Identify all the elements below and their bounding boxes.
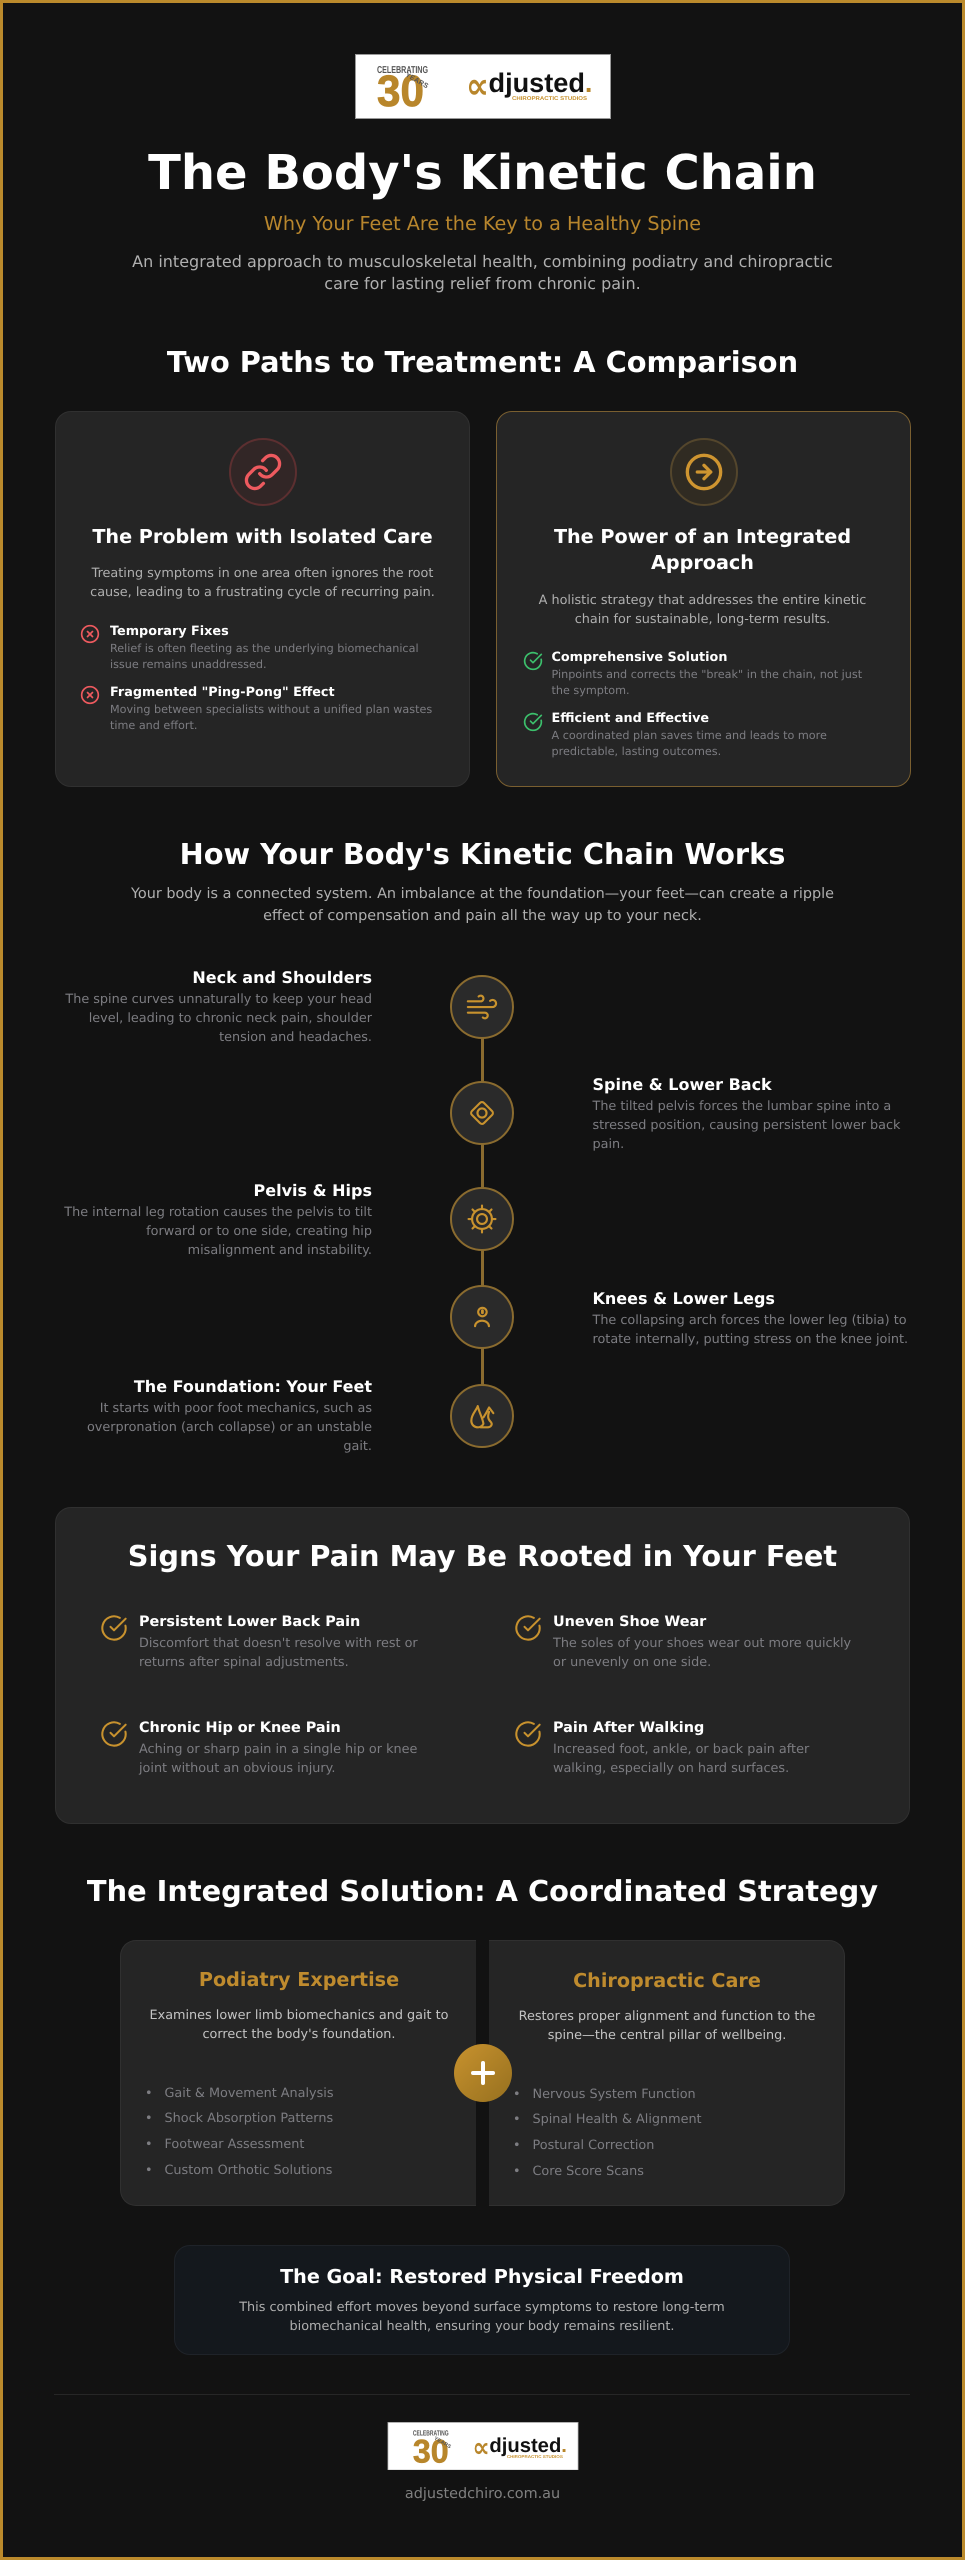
step: pelvis and hips: forward or to one side, creating hip (146, 1224, 372, 1239)
sign: lower back pain: returns after spinal adjustments. (139, 1655, 349, 1670)
icon: gear (450, 1187, 514, 1251)
icon: broken link (228, 438, 296, 506)
icon: person (450, 1285, 514, 1349)
description (90, 566, 435, 600)
service list: • (513, 2112, 521, 2127)
description: Treating symptoms in one area often ignores the root (92, 566, 433, 580)
header logo: djusted. (488, 68, 592, 98)
step: pelvis and hips (64, 1181, 372, 1258)
step: spine and lower back: stressed position, causing persistent lower back (592, 1118, 900, 1133)
footer logo: ∝ (472, 2432, 489, 2463)
panel: goal (174, 2245, 790, 2355)
footer logo: djusted. (489, 2433, 566, 2456)
description (239, 2300, 725, 2334)
icon: x (80, 686, 100, 704)
icon: plus badge (454, 2044, 512, 2102)
description: correct the body's foundation. (203, 2027, 395, 2042)
sign: pain after walking: Increased foot, ankle, or back pain after (553, 1742, 809, 1756)
sign: lower back pain (139, 1614, 418, 1670)
header logo: CHIROPRACTIC STUDIOS (512, 96, 587, 102)
step: pelvis and hips: Pelvis & Hips (254, 1181, 372, 1200)
step: neck and shoulders (65, 968, 372, 1045)
sign: uneven shoe wear (553, 1614, 851, 1670)
kinetic chain intro: Your body is a connected system. An imbalance at the foundation—your feet—can create a ripple (131, 886, 834, 902)
heading (554, 525, 851, 574)
sign: lower back pain: Discomfort that doesn't resolve with rest or (139, 1636, 418, 1650)
icon: x (80, 624, 100, 644)
panel: chiropractic (489, 1940, 845, 2206)
icon: check (515, 1615, 541, 1641)
sign: uneven shoe wear: Uneven Shoe Wear (553, 1614, 706, 1630)
service list (513, 2086, 702, 2179)
description: cause, leading to a frustrating cycle of recurring pain. (90, 585, 435, 600)
heading: Podiatry Expertise (199, 1968, 399, 1991)
panel: signs (55, 1507, 910, 1824)
footer logo: CELEBRATING (412, 2429, 448, 2437)
service list: • (513, 2138, 521, 2153)
step: knees and lower legs: Knees & Lower Legs (592, 1289, 775, 1308)
step: knees and lower legs: rotate internally, putting stress on the knee joint. (592, 1332, 908, 1347)
timeline connector (481, 1007, 484, 1416)
footer logo (388, 2422, 578, 2470)
service list: Shock Absorption Patterns (164, 2111, 333, 2126)
item: efficient (552, 710, 827, 758)
step: the foundation (87, 1377, 372, 1454)
step: knees and lower legs (592, 1289, 908, 1347)
service list: • (145, 2086, 153, 2100)
step: neck and shoulders: The spine curves unnaturally to keep your head (65, 992, 372, 1007)
item: comprehensive: the symptom. (552, 684, 630, 696)
heading: The Goal: Restored Physical Freedom (280, 2265, 684, 2288)
step: the foundation: gait. (343, 1439, 372, 1454)
header logo (355, 54, 611, 119)
description: This combined effort moves beyond surface symptoms to restore long-term (239, 2300, 725, 2314)
footer logo: YEARS (433, 2435, 451, 2449)
heading: comparison: Two Paths to Treatment: A Comparison (167, 345, 798, 379)
description: biomechanical health, ensuring your body remains resilient. (290, 2319, 674, 2334)
service list: • (145, 2163, 153, 2178)
item: temporary fixes: Relief is often fleeting as the underlying biomechanical (110, 642, 419, 654)
icon: diamond target (450, 1081, 514, 1145)
description: Examines lower limb biomechanics and gait to (150, 2008, 448, 2023)
sign: pain after walking: Pain After Walking (553, 1720, 704, 1736)
icon: wind (450, 975, 514, 1039)
service list: Gait & Movement Analysis (164, 2086, 334, 2100)
item: efficient: Efficient and Effective (552, 710, 709, 726)
sign: pain after walking (553, 1720, 810, 1776)
step: spine and lower back (592, 1075, 900, 1152)
service list: • (513, 2086, 521, 2102)
icon: check (515, 1721, 541, 1747)
heading: The Problem with Isolated Care (92, 525, 433, 548)
sign: hip or knee pain (138, 1720, 417, 1776)
intro text: An integrated approach to musculoskeletal health, combining podiatry and chiropractic (132, 252, 833, 271)
step: spine and lower back: Spine & Lower Back (592, 1075, 772, 1094)
step: the foundation: It starts with poor foot mechanics, such as (100, 1401, 372, 1416)
item: efficient: A coordinated plan saves time and leads to more (552, 728, 827, 742)
icon: check (524, 652, 542, 670)
icon: check (524, 712, 542, 732)
footer logo: 30 (412, 2433, 448, 2469)
service list (145, 2086, 334, 2178)
service list: • (513, 2164, 521, 2179)
description: spine—the central pillar of wellbeing. (548, 2028, 786, 2043)
subtitle: Why Your Feet Are the Key to a Healthy Spine (264, 212, 701, 235)
website: adjustedchiro.com.au (405, 2486, 560, 2502)
item: comprehensive: Pinpoints and corrects the "break" in the chain, not just (552, 668, 862, 680)
service list: • (145, 2111, 153, 2126)
description: A holistic strategy that addresses the entire kinetic (539, 592, 866, 608)
description: chain for sustainable, long-term results. (575, 612, 830, 627)
step: neck and shoulders: Neck and Shoulders (192, 968, 372, 987)
item: comprehensive (552, 650, 862, 696)
icon: check (101, 1721, 127, 1747)
icon: foot (450, 1384, 514, 1448)
sign: hip or knee pain: Chronic Hip or Knee Pain (139, 1720, 341, 1736)
step: pelvis and hips: misalignment and instability. (188, 1243, 372, 1258)
icon: check (101, 1615, 127, 1641)
item: temporary fixes: issue remains unaddressed. (110, 658, 267, 670)
sign: hip or knee pain: Aching or sharp pain in a single hip or knee (139, 1742, 417, 1756)
icon: arrow circle (670, 438, 738, 506)
item: efficient: predictable, lasting outcomes. (552, 744, 721, 758)
panel: integrated approach (496, 411, 910, 787)
sign: hip or knee pain: joint without an obvious injury. (139, 1761, 336, 1776)
header logo: YEARS (404, 72, 429, 90)
item: ping-pong effect: time and effort. (110, 718, 197, 732)
heading: Chiropractic Care (573, 1969, 761, 1992)
panel: isolated care (54, 411, 470, 787)
service list: Custom Orthotic Solutions (164, 2163, 332, 2178)
header logo: ∝ (466, 66, 488, 107)
title: The Body's Kinetic Chain (148, 145, 817, 201)
service list: Nervous System Function (532, 2086, 696, 2102)
item: ping-pong effect: Fragmented "Ping-Pong" Effect (110, 684, 335, 700)
service list: Postural Correction (532, 2138, 654, 2153)
service list: Spinal Health & Alignment (532, 2112, 702, 2127)
step: spine and lower back: The tilted pelvis forces the lumbar spine into a (592, 1099, 891, 1114)
sign: uneven shoe wear: The soles of your shoes wear out more quickly (553, 1636, 851, 1650)
header logo: 30 (376, 67, 424, 116)
heading: Approach (651, 551, 754, 574)
description (150, 2008, 448, 2042)
intro text (132, 252, 833, 293)
heading: Signs Your Pain May Be Rooted in Your Feet (128, 1539, 837, 1573)
header logo: CELEBRATING (376, 65, 428, 76)
panel: podiatry (120, 1940, 476, 2206)
kinetic chain intro (131, 886, 834, 924)
item: temporary fixes (110, 624, 419, 670)
item: temporary fixes: Temporary Fixes (110, 624, 229, 638)
step: the foundation: The Foundation: Your Feet (134, 1377, 372, 1396)
step: the foundation: overpronation (arch collapse) or an unstable (87, 1420, 372, 1435)
service list: Core Score Scans (532, 2164, 644, 2179)
description (538, 592, 866, 627)
description (519, 2009, 815, 2043)
heading: integrated solution: The Integrated Solution: A Coordinated Strategy (87, 1874, 878, 1908)
kinetic chain intro: effect of compensation and pain all the way up to your neck. (263, 908, 702, 924)
heading: The Power of an Integrated (554, 525, 851, 548)
service list: • (145, 2137, 153, 2152)
item: ping-pong effect (110, 684, 432, 732)
item: comprehensive: Comprehensive Solution (552, 650, 727, 664)
step: neck and shoulders: tension and headaches. (219, 1030, 372, 1045)
service list: Footwear Assessment (164, 2137, 304, 2152)
intro text: care for lasting relief from chronic pain. (324, 274, 641, 293)
sign: uneven shoe wear: or unevenly on one side. (553, 1655, 711, 1670)
description: Restores proper alignment and function to the (519, 2009, 815, 2024)
step: neck and shoulders: level, leading to chronic neck pain, shoulder (89, 1011, 372, 1026)
step: knees and lower legs: The collapsing arch forces the lower leg (tibia) to (592, 1313, 907, 1328)
step: spine and lower back: pain. (592, 1137, 624, 1152)
sign: pain after walking: walking, especially on hard surfaces. (553, 1761, 789, 1776)
item: ping-pong effect: Moving between specialists without a unified plan wastes (110, 702, 432, 716)
sign: lower back pain: Persistent Lower Back Pain (139, 1614, 360, 1630)
footer logo: CHIROPRACTIC STUDIOS (506, 2454, 563, 2459)
heading: kinetic chain: How Your Body's Kinetic Chain Works (180, 837, 785, 871)
step: pelvis and hips: The internal leg rotation causes the pelvis to tilt (64, 1205, 372, 1220)
